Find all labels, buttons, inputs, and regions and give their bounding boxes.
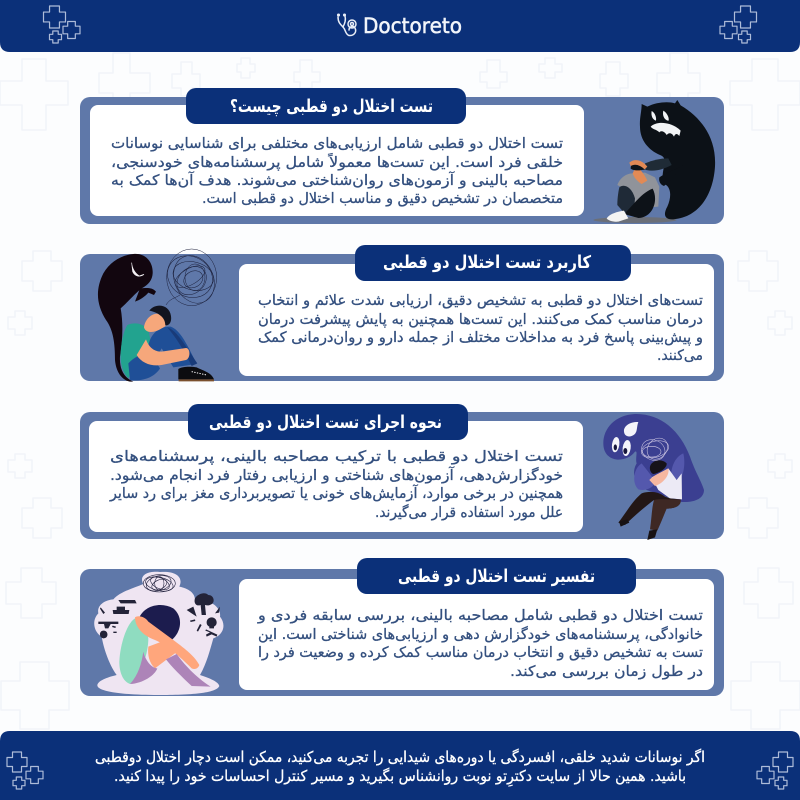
footer bar: [0, 731, 800, 800]
title: نحوه اجرای تست اختلال دو قطبی: [209, 413, 442, 433]
body text: و پیش‌بینی پاسخ فرد به مداخلات مختلف از جمله دارو و روان‌درمانی کمک: [258, 330, 703, 346]
illustration: person with purple creature: [603, 414, 704, 540]
text card: [89, 421, 583, 532]
logo wordmark: Doctoreto: [363, 14, 462, 38]
icon: crosses right: [757, 752, 793, 789]
title: کاربرد تست اختلال دو قطبی: [383, 253, 592, 273]
text card: [239, 579, 714, 690]
panel: test usage: [80, 245, 724, 382]
title: تست اختلال دو قطبی چیست؟: [230, 97, 433, 117]
icon: tank bottom: [113, 607, 129, 614]
body text: همچنین در برخی موارد، آزمایش‌های خونی یا تصویربرداری مغز برای رد سایر: [109, 484, 563, 502]
body text: [109, 449, 563, 521]
header bar: [0, 0, 800, 52]
icon: bullet marks: [100, 607, 117, 633]
title pill: [188, 404, 468, 440]
body text: در طول زمان بررسی می‌کند.: [510, 664, 703, 680]
body text: می‌کنند.: [657, 348, 703, 364]
panel background: [80, 254, 724, 381]
panel: interpreting the test: [80, 558, 724, 696]
body text: [257, 608, 703, 680]
body text: خودگزارش‌دهی، آزمون‌های شناختی و ارزیابی رفتار فرد انجام می‌شود.: [110, 466, 563, 484]
panel background: [80, 569, 724, 696]
illustration: curled up woman with dark thoughts: [94, 572, 223, 695]
body text: خانوادگی، پرسشنامه‌های خودگزارش دهی و ارزیابی‌های شناختی است. این: [258, 626, 703, 643]
icon: explosion: [195, 593, 214, 615]
body text: [111, 136, 563, 207]
body text: تست اختلال دو قطبی شامل ارزیابی‌های مختلفی برای شناسایی نوسانات: [111, 136, 563, 152]
body text: [258, 293, 703, 364]
text card: [90, 105, 584, 216]
icon: shell: [187, 607, 197, 617]
call to action text: [95, 748, 705, 788]
body text: علل مورد استفاده قرار می‌گیرند.: [375, 504, 563, 521]
icon: tank top: [118, 600, 137, 603]
icon: crosses left: [44, 6, 80, 43]
body text: متخصصان در تشخیص دقیق و مناسب اختلال دو قطبی است.: [202, 191, 563, 207]
icon: crosses right: [720, 6, 756, 43]
call to action text: باشید. همین حالا از سایت دکترِتو نوبت روانشناس بگیرید و مسیر کنترل احساسات خود را پیدا کنید.: [114, 767, 686, 788]
body text: درمان مناسب کمک می‌کنند. این تست‌ها همچنین به پایش پیشرفت درمان: [258, 312, 703, 328]
call to action text: اگر نوسانات شدید خلقی، افسردگی یا دوره‌های شیدایی را تجربه می‌کنید، ممکن است دچار اختلال دوقطبی: [95, 748, 705, 766]
icon: fragments: [190, 607, 220, 632]
body text: تست اختلال دو قطبی با ترکیب مصاحبه بالینی، پرسشنامه‌های: [110, 449, 563, 465]
panel: how the test is done: [80, 404, 724, 540]
panel background: [80, 412, 724, 539]
body text: تست‌های اختلال دو قطبی به تشخیص دقیق، ارزیابی شدت علائم و انتخاب: [258, 293, 703, 309]
title: تفسیر تست اختلال دو قطبی: [398, 567, 595, 587]
illustration: man with shadow monster: [593, 100, 715, 223]
title pill: [357, 558, 636, 594]
icon: rifle: [98, 622, 118, 628]
body text: مصاحبه بالینی و آزمون‌های روان‌شناختی می‌شوند. هدف آن‌ها کمک به: [111, 171, 563, 189]
panel background: [80, 97, 724, 224]
body text: تست اختلال دو قطبی شامل مصاحبه بالینی، بررسی سابقه فردی و: [257, 608, 703, 624]
text card: [239, 264, 714, 376]
icon: grenade: [100, 631, 107, 638]
panel: what is the test: [80, 88, 724, 224]
title pill: [186, 88, 466, 124]
icon: crosses left: [7, 752, 43, 789]
body text: تست به تشخیص دقیق و انتخاب درمان مناسب کمک کرده و وضعیت فرد را: [258, 645, 703, 661]
icon: skull: [205, 617, 217, 637]
body text: خلقی فرد است. این تست‌ها معمولاً شامل پرسشنامه‌های خودسنجی،: [111, 153, 563, 171]
logo: [338, 14, 462, 38]
illustration: boy with shadow and scribble: [98, 248, 222, 382]
title pill: [355, 245, 631, 281]
icon: stethoscope: [338, 14, 356, 36]
